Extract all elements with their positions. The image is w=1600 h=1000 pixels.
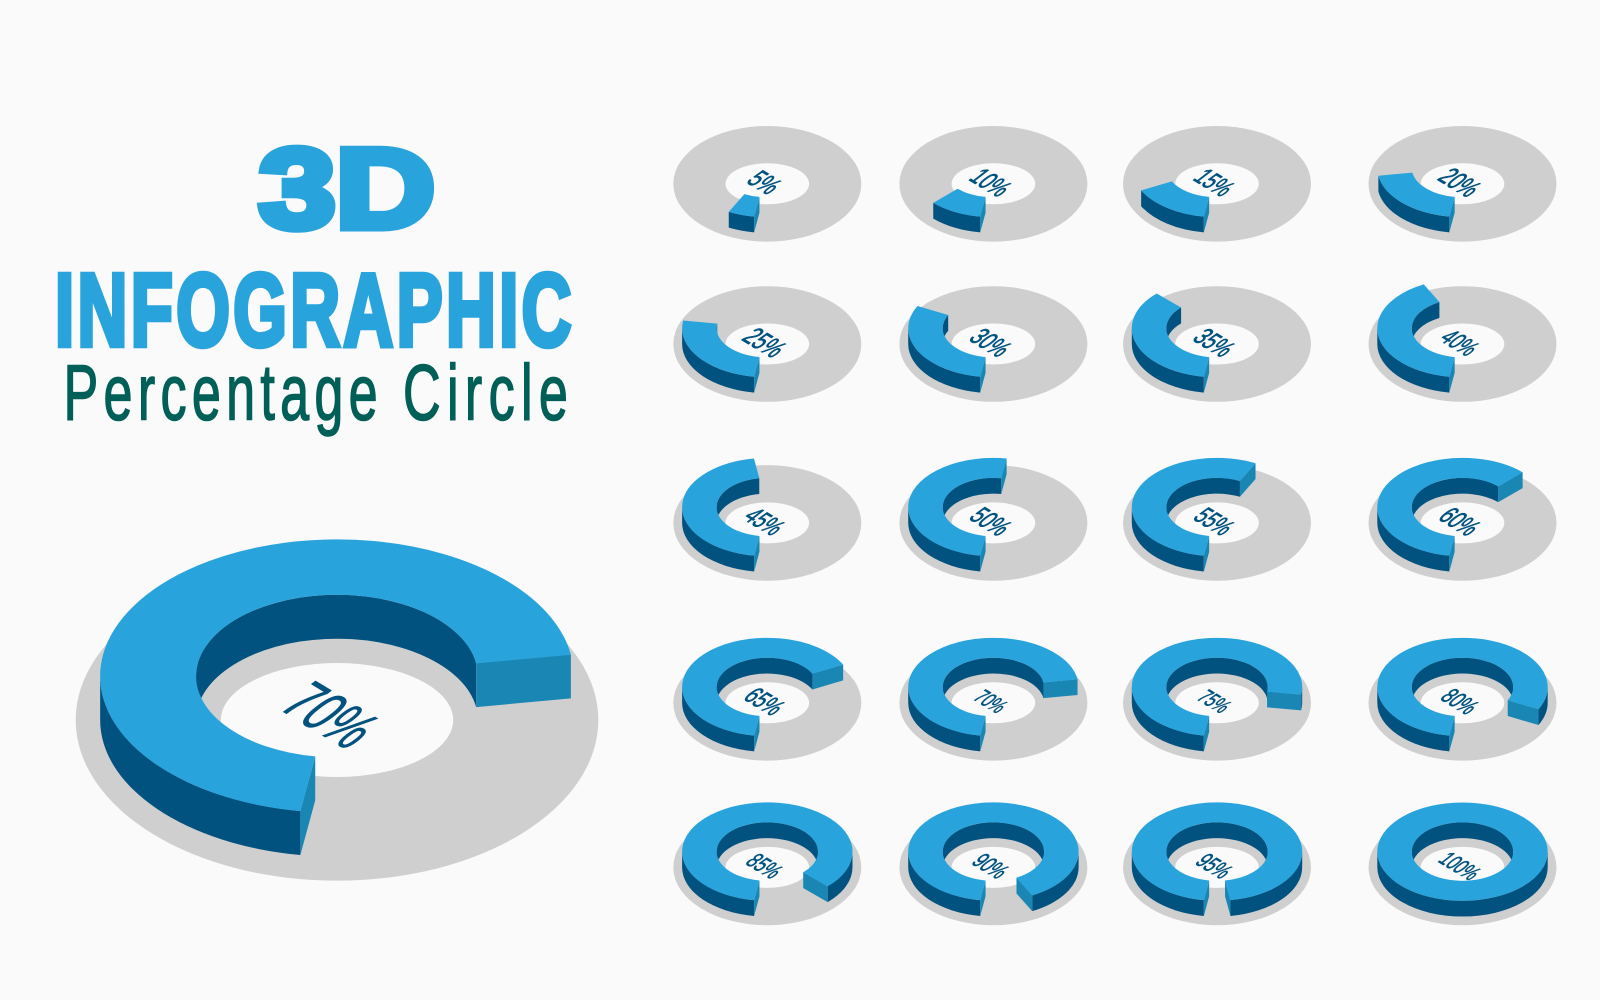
ring: 70% <box>908 642 1078 751</box>
base disc <box>1123 465 1311 581</box>
label: 25%: 25% <box>735 323 793 363</box>
donut: 75% <box>1123 642 1311 761</box>
donut: 85% <box>673 807 861 925</box>
label: 70%: 70% <box>967 686 1013 718</box>
center hole <box>726 502 809 543</box>
ring: 60% <box>1377 462 1540 571</box>
donut: 50% <box>899 459 1087 581</box>
donut: 25% <box>673 283 861 402</box>
title <box>55 126 575 437</box>
center hole <box>726 163 809 204</box>
ring: 75% <box>1132 642 1302 751</box>
donut: 70% <box>899 642 1087 761</box>
donut: 45% <box>673 462 861 581</box>
center hole <box>952 847 1035 888</box>
base disc <box>76 559 598 881</box>
center hole <box>1421 682 1504 723</box>
center hole <box>1175 502 1259 543</box>
base disc <box>1123 126 1311 242</box>
heading: INFOGRAPHIC: INFOGRAPHIC <box>55 253 575 368</box>
base disc <box>673 810 861 925</box>
center hole <box>726 682 809 723</box>
center hole <box>1421 163 1504 204</box>
ring: 90% <box>908 807 1079 916</box>
ring: 70% <box>100 552 571 855</box>
label: 35%: 35% <box>1186 324 1242 362</box>
donut: 55% <box>1123 462 1311 581</box>
label: 55%: 55% <box>1187 503 1242 540</box>
label: 40%: 40% <box>1434 325 1486 361</box>
center hole <box>1175 847 1259 888</box>
center hole <box>952 682 1035 723</box>
base disc <box>899 286 1087 402</box>
donut: 10% <box>899 123 1087 242</box>
ring: 15% <box>1139 123 1295 232</box>
subheading: Percentage Circle: Circle <box>403 349 574 437</box>
label: 85%: 85% <box>740 850 788 883</box>
label: 80%: 80% <box>1434 684 1486 719</box>
ring: 5% <box>690 123 845 232</box>
donut: 40% <box>1368 283 1556 402</box>
label: 65%: 65% <box>737 683 792 720</box>
center hole <box>952 163 1035 204</box>
base disc <box>1123 286 1311 402</box>
base disc <box>1368 286 1556 402</box>
label: 10%: 10% <box>962 164 1018 202</box>
donut: 20% <box>1368 123 1556 242</box>
large donut: 70% <box>76 552 598 881</box>
ring: 10% <box>916 123 1071 232</box>
ring: 30% <box>908 283 1071 393</box>
center hole <box>1175 163 1259 204</box>
ring: 55% <box>1132 462 1295 571</box>
label: 45%: 45% <box>737 503 792 540</box>
base disc <box>1368 645 1556 761</box>
label: 75%: 75% <box>1191 686 1237 718</box>
donut: 80% <box>1368 642 1556 761</box>
ring: 80% <box>1377 642 1548 751</box>
base disc <box>899 645 1087 761</box>
base disc <box>1123 645 1311 761</box>
donut: 35% <box>1123 283 1311 402</box>
subheading: Percentage Circle <box>64 349 574 437</box>
base disc <box>899 810 1087 925</box>
ring: 50% <box>908 459 1071 571</box>
base disc <box>673 126 861 242</box>
donut: 5% <box>673 123 861 242</box>
ring: 100% <box>1377 812 1548 917</box>
label: 15%: 15% <box>1187 164 1242 201</box>
donut: 90% <box>899 807 1087 925</box>
center hole <box>726 324 809 364</box>
center hole <box>1421 502 1504 543</box>
ring: 20% <box>1378 123 1540 232</box>
center hole <box>952 324 1035 364</box>
subheading: Percentage Circle: Percentage <box>64 349 383 437</box>
label: 50%: 50% <box>962 503 1018 541</box>
ring: 85% <box>682 807 852 916</box>
ring: 95% <box>1132 807 1302 916</box>
donut: 30% <box>899 283 1087 402</box>
ring: 65% <box>682 642 845 751</box>
base disc <box>1123 810 1311 925</box>
label: 30%: 30% <box>962 324 1018 362</box>
base disc <box>899 126 1087 242</box>
ring: 35% <box>1132 283 1295 393</box>
label: 5%: 5% <box>740 166 788 200</box>
label: 90%: 90% <box>966 850 1015 883</box>
base disc <box>899 465 1087 581</box>
center hole <box>221 663 453 777</box>
base disc <box>673 465 861 581</box>
base disc <box>1368 810 1556 925</box>
label: 60%: 60% <box>1431 503 1487 541</box>
donut: 15% <box>1123 123 1311 242</box>
center hole <box>1421 847 1504 888</box>
heading: 3D: 3D <box>259 126 435 252</box>
ring: 40% <box>1377 283 1540 393</box>
base disc <box>673 645 861 761</box>
label: 20%: 20% <box>1431 164 1487 202</box>
label: 100%: 100% <box>1432 849 1486 885</box>
label: 70%: 70% <box>266 671 395 759</box>
donut: 60% <box>1368 462 1556 581</box>
ring: 25% <box>682 283 845 393</box>
center hole <box>1175 682 1259 723</box>
donut: 100% <box>1368 810 1556 925</box>
center hole <box>1421 324 1504 364</box>
center hole <box>726 847 809 888</box>
base disc <box>673 286 861 402</box>
donut: 95% <box>1123 807 1311 925</box>
center hole <box>952 502 1035 543</box>
label: 95%: 95% <box>1189 850 1238 883</box>
ring: 45% <box>682 462 845 571</box>
center hole <box>1175 324 1259 364</box>
base disc <box>1368 126 1556 242</box>
donut: 65% <box>673 642 861 761</box>
base disc <box>1368 465 1556 581</box>
